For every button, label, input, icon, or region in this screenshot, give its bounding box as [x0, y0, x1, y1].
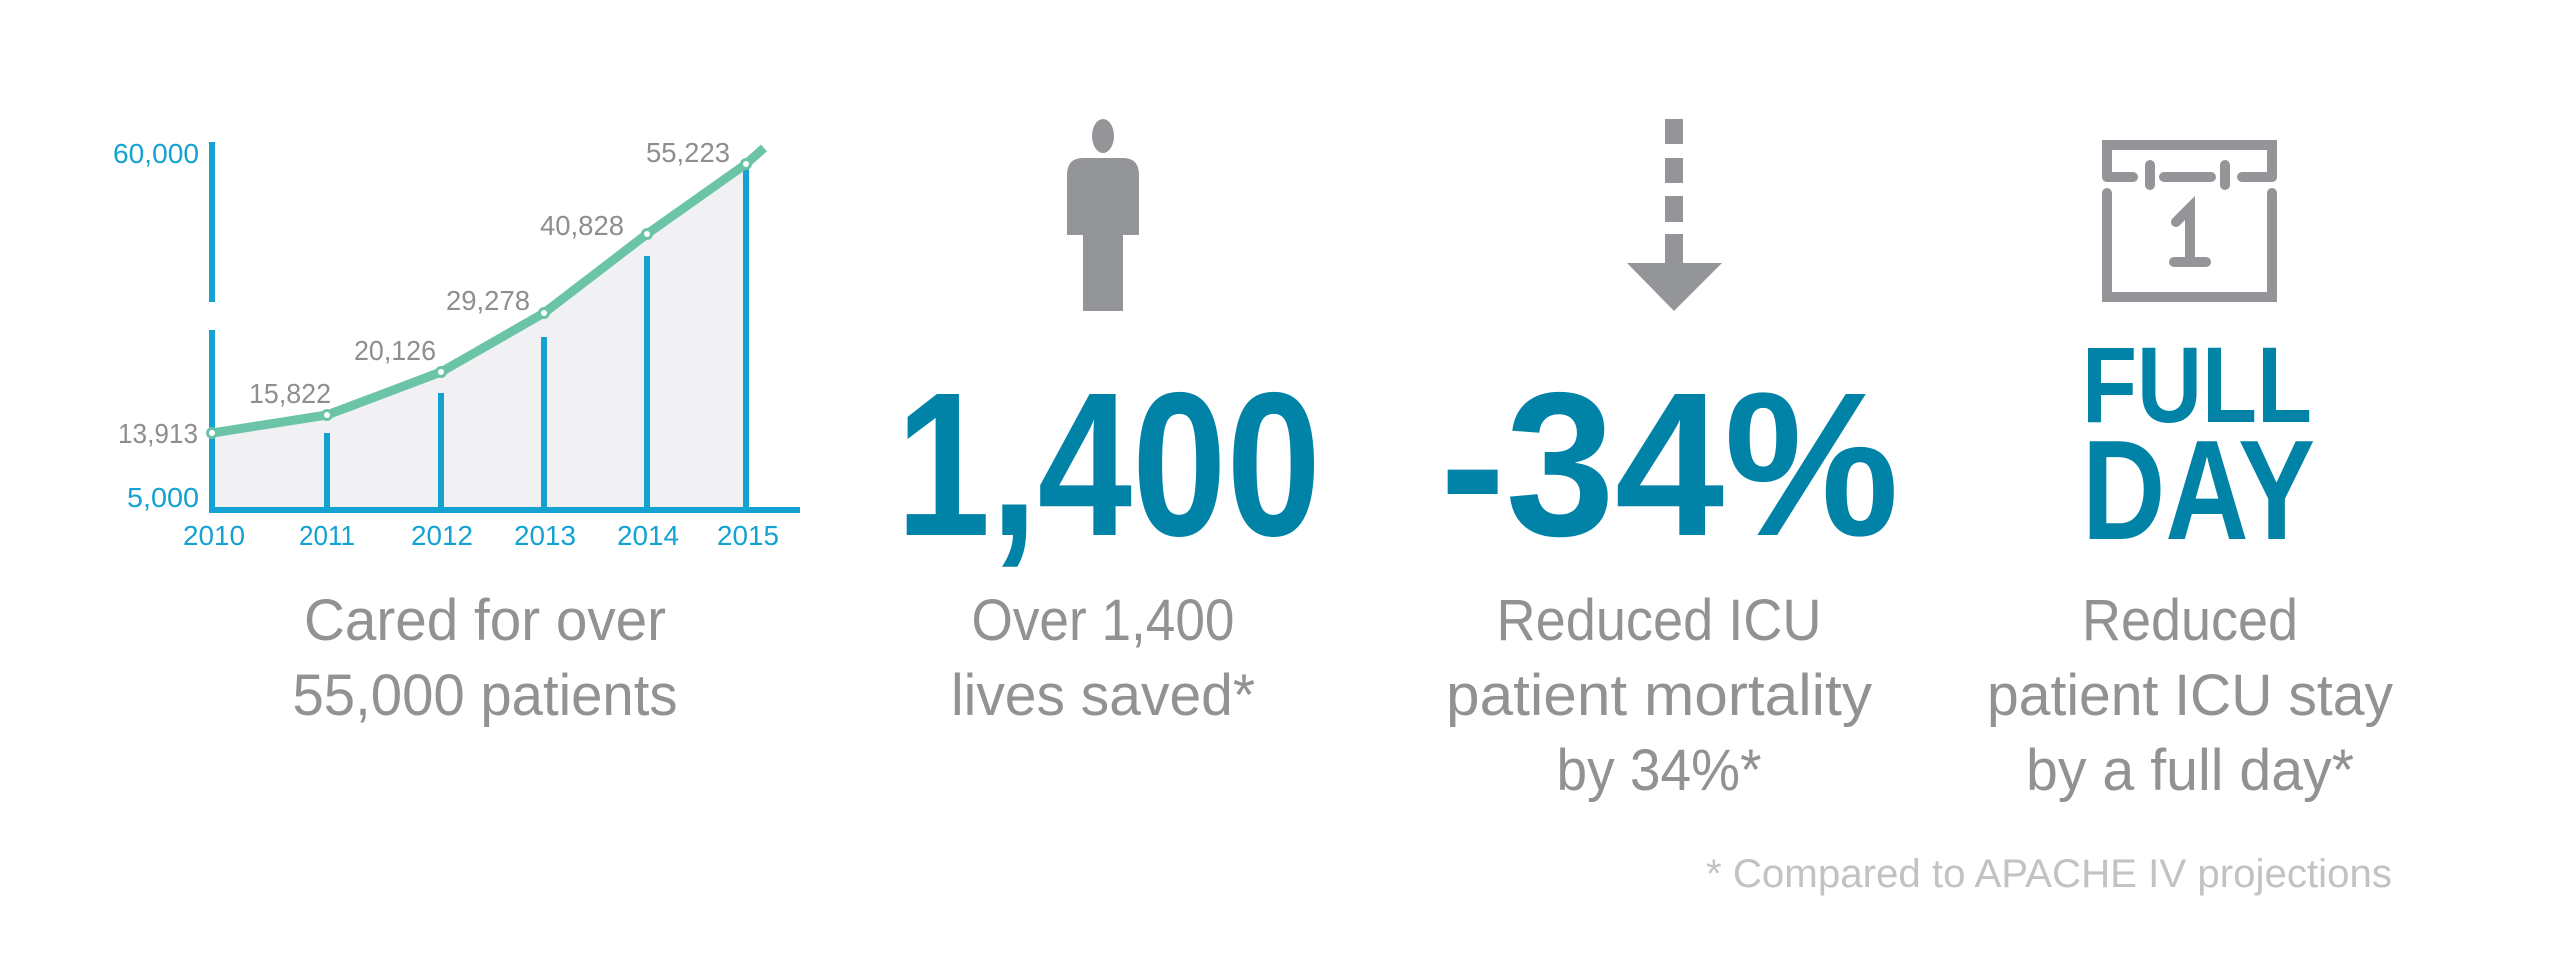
panel: patient growth chart	[113, 137, 800, 551]
caption: lives saved	[951, 588, 1255, 728]
data labels: 40,828	[540, 210, 624, 241]
caption: lives saved: lives saved*	[951, 663, 1255, 728]
axis labels: 2012	[411, 520, 473, 551]
big number: 1,400: 1,400	[896, 350, 1321, 579]
caption: lives saved: Over 1,400	[972, 588, 1234, 653]
caption: ICU stay: patient ICU stay	[1987, 663, 2393, 728]
caption: mortality: by 34%*	[1556, 738, 1762, 803]
data labels: 15,822	[249, 378, 331, 409]
big text: FULL DAY	[2082, 324, 2315, 570]
axis labels: 2013	[514, 520, 576, 551]
caption: mortality: patient mortality	[1446, 663, 1872, 728]
data labels: 20,126	[354, 335, 436, 366]
data labels: 13,913	[118, 418, 198, 449]
data labels	[118, 137, 730, 449]
data labels: 55,223	[646, 137, 730, 168]
caption: patients: Cared for over	[304, 588, 666, 653]
caption: patients	[292, 588, 678, 728]
axis labels: 2015	[717, 520, 779, 551]
axis labels: 2011	[299, 520, 355, 551]
caption: patients: 55,000 patients	[292, 663, 678, 728]
chart area fill	[212, 164, 746, 510]
axis labels	[113, 138, 779, 551]
line series	[212, 148, 764, 433]
big text: FULL DAY: FULL	[2082, 324, 2312, 445]
caption: mortality	[1446, 588, 1872, 803]
axis labels: 2010	[183, 520, 245, 551]
data labels: 29,278	[446, 285, 530, 316]
caption: mortality: Reduced ICU	[1496, 588, 1822, 653]
icon: dashed down arrow	[1627, 119, 1722, 311]
big text: FULL DAY: DAY	[2082, 411, 2315, 570]
footnote: * Compared to APACHE IV projections	[1706, 852, 2392, 896]
icon: person	[1067, 119, 1139, 311]
icon: calendar	[2107, 145, 2272, 297]
caption: ICU stay: by a full day*	[2026, 738, 2354, 803]
axis labels: 2014	[617, 520, 679, 551]
axis labels: 5,000	[127, 482, 199, 513]
caption: ICU stay: Reduced	[2082, 588, 2298, 653]
y axis	[209, 142, 800, 512]
caption: ICU stay	[1987, 588, 2393, 803]
big number: -34%: -34%	[1440, 350, 1899, 579]
axis labels: 60,000	[113, 138, 199, 169]
